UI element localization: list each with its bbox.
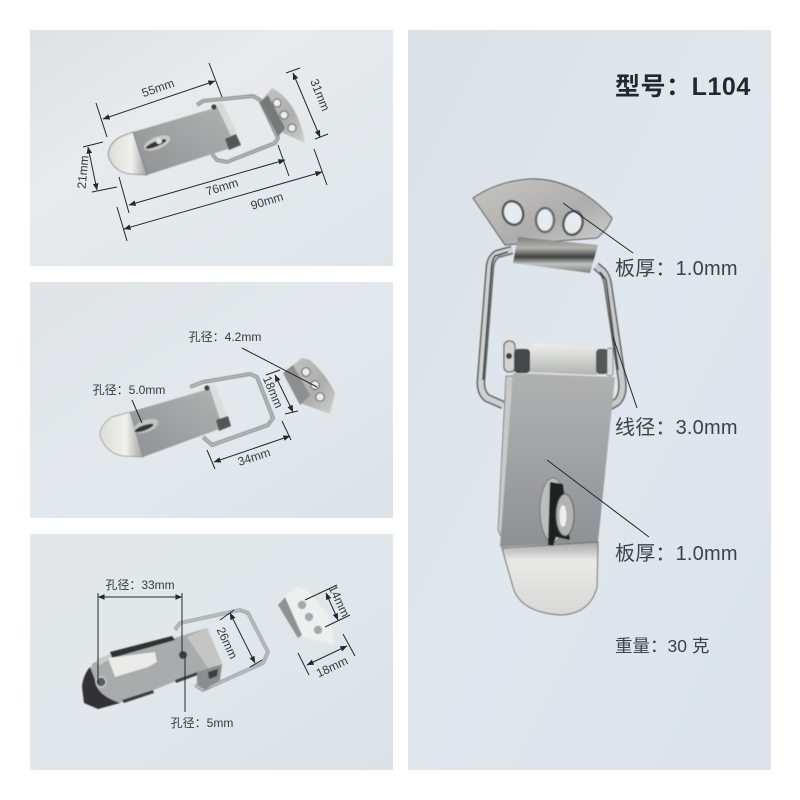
dimension: 31mm <box>286 68 333 139</box>
rounded tip <box>502 542 598 615</box>
dimension: 76mm <box>119 145 289 213</box>
main latch photo <box>473 179 622 615</box>
dimension: 55mm <box>96 63 222 137</box>
dimension: 18mm <box>260 370 298 414</box>
label: hole 5mm <box>171 655 233 730</box>
dimension: 55mm: 55mm <box>140 76 176 100</box>
spec: wire diameter <box>613 337 738 439</box>
dimension: 14mm <box>305 583 352 627</box>
side flange <box>498 376 513 547</box>
wire loop <box>481 250 622 406</box>
dimension: 18mm: 18mm <box>260 374 286 410</box>
small latch photo: back view <box>82 587 335 709</box>
small latch photo: angled view <box>100 358 335 457</box>
spec: wire diameter: 线径：3.0mm <box>615 416 738 439</box>
label: spacing 33mm: 孔径：33mm <box>105 578 175 592</box>
small latch photo: top view <box>108 88 305 175</box>
label: hole 5.0mm: 孔径：5.0mm <box>93 383 165 397</box>
dimension: 18mm <box>298 634 355 680</box>
label: spacing 33mm <box>98 578 182 683</box>
hinge <box>504 341 613 376</box>
model title: 型号：L104 <box>615 73 751 101</box>
panel: main product <box>408 30 771 770</box>
label: hole 4.2mm: 孔径：4.2mm <box>189 330 261 344</box>
hook roller <box>513 237 598 273</box>
dimension: 26mm: 26mm <box>214 625 240 661</box>
spec: weight: 重量：30 克 <box>615 636 709 656</box>
label: hole 5.0mm <box>93 383 165 423</box>
panel: hole diameters <box>30 282 393 518</box>
dimension: 26mm <box>214 610 262 667</box>
slot with staple <box>540 478 574 546</box>
dimension: 21mm: 21mm <box>75 155 91 189</box>
dimension: 76mm: 76mm <box>204 175 240 199</box>
label: hole 4.2mm <box>189 330 317 387</box>
dimension: 31mm: 31mm <box>307 77 333 113</box>
panel: overall dimensions <box>30 30 393 266</box>
latch plate <box>500 373 615 547</box>
spec: plate thickness <box>547 460 738 565</box>
spec: top plate thickness <box>563 203 738 280</box>
label: hole 5mm: 孔径：5mm <box>171 716 233 730</box>
hook plate with three holes <box>473 179 612 245</box>
dimension: 14mm: 14mm <box>326 583 352 619</box>
dimension: 90mm: 90mm <box>249 189 285 213</box>
panel: hole spacing <box>30 534 393 770</box>
dimension: 21mm <box>75 142 117 192</box>
dimension: 18mm: 18mm <box>314 654 350 680</box>
dimension: 34mm <box>207 421 291 469</box>
dimension: 90mm <box>117 149 327 241</box>
dimension: 34mm: 34mm <box>236 445 272 469</box>
spec: plate thickness: 板厚：1.0mm <box>615 542 738 565</box>
spec: top plate thickness: 板厚：1.0mm <box>615 257 738 280</box>
